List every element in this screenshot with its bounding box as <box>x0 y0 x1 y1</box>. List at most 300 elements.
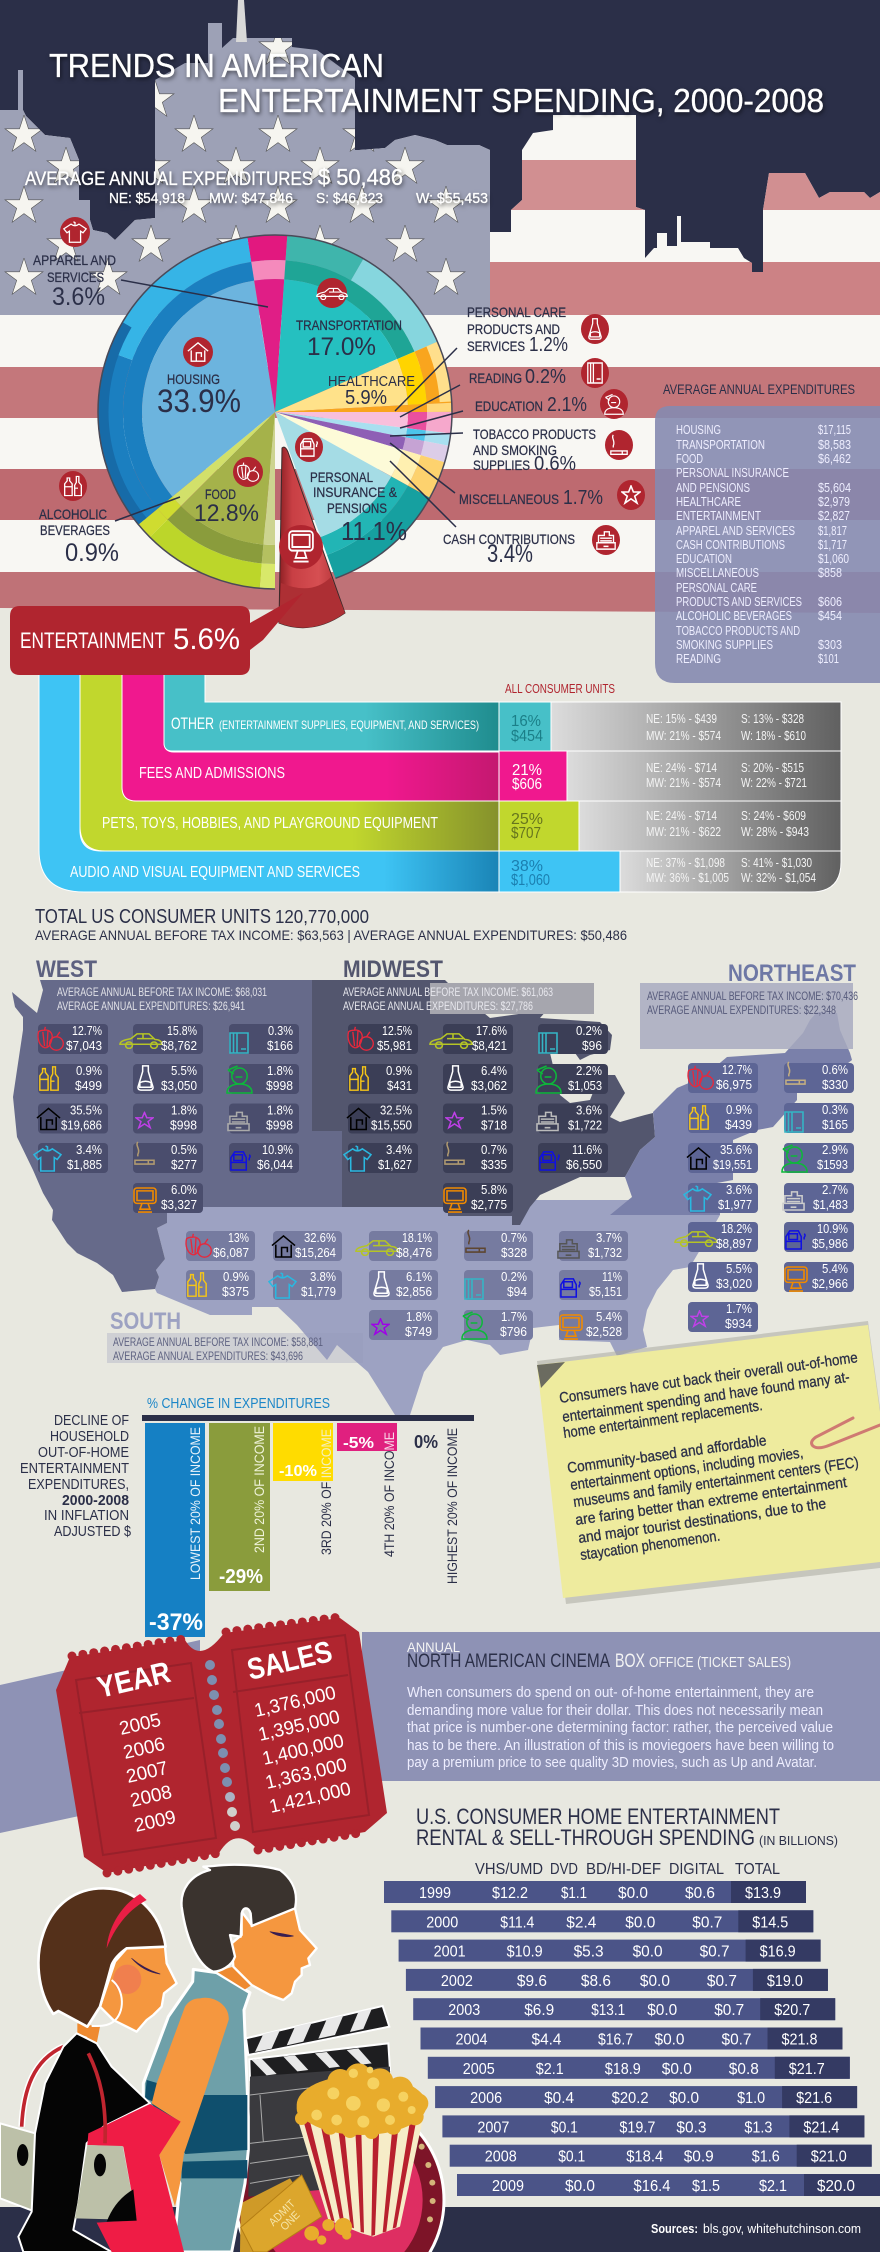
midwest heading: AVERAGE ANNUAL BEFORE TAX INCOME: $61,063 <box>343 987 553 999</box>
panel: average annual expenditures list: $6,462 <box>818 452 851 466</box>
sticky note: are faring better than extreme entertainment <box>574 1474 849 1529</box>
stats: midwest: 17.6% <box>476 1023 507 1038</box>
table rows: spending by year: $0.4 <box>544 2090 574 2107</box>
pets and toys band <box>80 660 499 851</box>
stats: midwest: 6.4% <box>481 1063 507 1078</box>
table rows: spending by year: 2006 <box>470 2090 502 2107</box>
panel: average annual expenditures list: $858 <box>818 566 842 580</box>
pie label: housing <box>157 337 241 419</box>
stats: west: $3,327 <box>161 1197 197 1212</box>
pie label: transportation: TRANSPORTATION <box>296 317 402 333</box>
panel: average annual expenditures list: HOUSING <box>676 423 721 437</box>
table rows: spending by year: $1.0 <box>737 2090 765 2107</box>
panel: average annual expenditures list: $17,115 <box>818 423 851 437</box>
chart: decline in out-of-home expenditures: 3RD 20% OF INCOME <box>318 1429 334 1555</box>
stats: south: $2,856 <box>396 1284 432 1299</box>
ticket: year and sales table: 2006 <box>121 1734 167 1764</box>
table rows: spending by year: $0.0 <box>565 2178 595 2195</box>
table rows: spending by year: $20.0 <box>817 2178 855 2195</box>
table rows: spending by year: $19.7 <box>619 2119 655 2136</box>
pie label: tobacco: SUPPLIES <box>473 457 530 473</box>
stats: south: 5.4% <box>596 1309 622 1324</box>
table rows: spending by year: 2009 <box>492 2178 524 2195</box>
stats: midwest: $6,550 <box>566 1157 602 1172</box>
regional breakdown values: NE: 15% - $439 <box>646 711 717 726</box>
panel: average annual expenditures list: AND PENSIONS <box>676 481 750 495</box>
stats: northeast: $934 <box>725 1316 752 1331</box>
pie label: cash contributions: 3.4% <box>487 540 533 568</box>
stats: south: 13% <box>228 1230 249 1245</box>
chart side label: HOUSEHOLD <box>50 1428 129 1445</box>
panel: average annual expenditures list: $1,060 <box>818 552 849 566</box>
table rows: spending by year: $0.3 <box>676 2119 706 2136</box>
total consumer units heading: TOTAL US CONSUMER UNITS <box>35 906 271 928</box>
sticky note: entertainment spending and have found many at- <box>561 1369 851 1426</box>
chart side label <box>20 1412 132 1540</box>
admit one tickets: ONE <box>279 2209 303 2233</box>
stats: south: 0.2% <box>501 1269 527 1284</box>
table rows: spending by year: 2000 <box>426 1914 458 1931</box>
stats: west: 6.0% <box>171 1182 197 1197</box>
table rows: spending by year: $1.6 <box>752 2149 780 2166</box>
panel: average annual expenditures list: CASH CONTRIBUTIONS <box>676 538 785 552</box>
panel: north american cinema box office: NORTH AMERICAN CINEMA <box>407 1651 610 1672</box>
chart: decline in out-of-home expenditures: 2ND 20% OF INCOME <box>251 1426 267 1553</box>
panel: average annual expenditures list: SMOKING SUPPLIES <box>676 638 773 652</box>
pie label: miscellaneous: MISCELLANEOUS <box>459 491 559 507</box>
table rows: spending by year: 2001 <box>434 1944 466 1961</box>
icon: paper clip <box>812 1418 880 1448</box>
pie label: alcoholic beverages: 0.9% <box>65 539 119 567</box>
pie label: tobacco: TOBACCO PRODUCTS <box>473 426 596 442</box>
ticket: year and sales table: 2007 <box>124 1758 170 1788</box>
footer band <box>0 2207 880 2252</box>
callout leader lines <box>115 280 463 527</box>
stats: west: $6,044 <box>257 1157 293 1172</box>
heading: home entertainment spending: RENTAL & SELL-THROUGH SPENDING <box>416 1825 755 1850</box>
stats: midwest: 0.2% <box>576 1023 602 1038</box>
panel: average annual expenditures list: $2,979 <box>818 495 850 509</box>
pie label: cash contributions <box>443 525 620 568</box>
stats: west: 0.5% <box>171 1142 197 1157</box>
regional breakdown values: S: 41% - $1,030 <box>741 855 812 870</box>
popcorn box <box>295 2063 428 2245</box>
stats: midwest: $718 <box>481 1118 507 1132</box>
average annual expenditures header: MW: $47,846 <box>209 190 293 207</box>
regional breakdown values: W: 18% - $610 <box>741 728 806 743</box>
pie label: education: EDUCATION <box>475 398 543 414</box>
table rows: spending by year: $12.2 <box>492 1885 528 1902</box>
entertainment slice cone <box>279 447 345 628</box>
pie label: housing: 33.9% <box>157 383 241 419</box>
header night sky <box>0 0 880 330</box>
stats: northeast: 12.7% <box>722 1062 752 1077</box>
stats: south: $1,732 <box>588 1245 622 1260</box>
chart side label: EXPENDITURES, <box>28 1476 129 1493</box>
panel: average annual expenditures list: PRODUCTS AND SERVICES <box>676 595 802 609</box>
panel: average annual expenditures list: HEALTHCARE <box>676 495 741 509</box>
table rows: spending by year: $0.6 <box>685 1885 715 1902</box>
fees and admissions band <box>122 660 499 801</box>
sources: Sources: <box>651 2221 698 2236</box>
stats: west: 0.3% <box>268 1023 293 1038</box>
table rows: spending by year: $18.9 <box>605 2061 641 2078</box>
pie label: cash contributions: CASH CONTRIBUTIONS <box>443 531 575 547</box>
stats: northeast: $439 <box>725 1117 752 1132</box>
pie label: personal insurance <box>295 432 407 546</box>
stats: south: $5,151 <box>589 1284 622 1299</box>
panel: entertainment breakdown: $454 <box>511 728 543 745</box>
housing rim shadow <box>33 170 517 654</box>
map: west region <box>12 980 342 1292</box>
stats: northeast: $1593 <box>817 1157 848 1172</box>
other band <box>164 660 499 751</box>
table rows: spending by year: $9.6 <box>517 1973 547 1990</box>
title: ENTERTAINMENT SPENDING, 2000-2008 <box>218 82 824 119</box>
chart: decline in out-of-home expenditures: -10% <box>279 1463 317 1480</box>
table rows: spending by year: $13.1 <box>591 2002 625 2019</box>
panel: average annual expenditures list: $303 <box>818 638 842 652</box>
stats: west: 1.8% <box>267 1102 293 1118</box>
panel: north american cinema box office <box>0 1632 880 1833</box>
average annual expenditures header: $ 50,486 <box>318 164 403 190</box>
regional breakdown values: W: 28% - $943 <box>741 824 809 839</box>
stats: south: $749 <box>405 1324 432 1339</box>
stats: south <box>186 1230 628 1340</box>
stats: west: 35.5% <box>70 1102 102 1118</box>
sticky note: home entertainment replacements. <box>562 1397 764 1442</box>
south heading: SOUTH <box>110 1308 181 1335</box>
panel: entertainment breakdown: $606 <box>512 776 542 793</box>
stats: west: 1.8% <box>267 1063 293 1078</box>
west heading: AVERAGE ANNUAL BEFORE TAX INCOME: $68,031 <box>57 987 267 999</box>
chart side label: DECLINE OF <box>54 1412 129 1429</box>
table rows: spending by year: $0.0 <box>669 2090 699 2107</box>
panel: entertainment breakdown: 38% <box>511 858 543 875</box>
stats: south: 3.7% <box>596 1230 622 1245</box>
stats: northeast: $5,986 <box>812 1236 848 1251</box>
stats: midwest: $2,775 <box>471 1197 507 1212</box>
panel: average annual expenditures list: TOBACCO PRODUCTS AND <box>676 624 800 638</box>
pie label: education: 2.1% <box>547 394 587 416</box>
stats: northeast: $19,551 <box>713 1157 752 1172</box>
panel: average annual expenditures list: $454 <box>818 609 842 623</box>
table rows: spending by year: $5.3 <box>574 1944 604 1961</box>
heading: home entertainment spending: (IN BILLIONS) <box>759 1833 838 1848</box>
stats: south: 11% <box>602 1269 622 1284</box>
panel: entertainment breakdown: OTHER <box>171 714 214 733</box>
stats: south: 0.7% <box>501 1230 527 1245</box>
panel: entertainment breakdown: AUDIO AND VISUAL EQUIPMENT AND SERVICES <box>70 864 360 881</box>
ticket: year and sales table: SALES <box>244 1635 335 1687</box>
table rows: spending by year: $20.2 <box>612 2090 649 2107</box>
chart side label: ADJUSTED $ <box>54 1523 132 1540</box>
clapperboard <box>246 2006 390 2197</box>
panel: entertainment breakdown: ALL CONSUMER UNITS <box>505 681 615 696</box>
chart: decline in out-of-home expenditures: -37% <box>149 1609 203 1636</box>
stats: west: 5.5% <box>171 1063 197 1078</box>
pie label: alcoholic beverages: ALCOHOLIC <box>39 506 107 522</box>
regional breakdown values: S: 13% - $328 <box>741 711 804 726</box>
pie label: food: 12.8% <box>194 500 259 527</box>
pie label: apparel: 3.6% <box>52 283 105 311</box>
table rows: spending by year: $0.7 <box>692 1914 722 1931</box>
stats: midwest: 2.2% <box>576 1063 602 1078</box>
stats: west: $998 <box>266 1078 293 1093</box>
stats: midwest: $431 <box>387 1078 412 1093</box>
panel: north american cinema box office: ANNUAL <box>407 1639 460 1655</box>
midwest heading: MIDWEST <box>343 956 443 983</box>
stats: west: $277 <box>171 1157 197 1172</box>
stats: south: $8,476 <box>396 1245 432 1260</box>
pie label: miscellaneous <box>459 480 645 510</box>
ticket: year and sales table: 1,363,000 <box>263 1755 349 1794</box>
pie rim line <box>98 235 452 589</box>
stats: midwest: $8,421 <box>472 1038 507 1053</box>
table column headers: VHS/UMD <box>475 1861 543 1878</box>
panel: average annual expenditures list: $2,827 <box>818 509 850 523</box>
pie label: food: FOOD <box>205 486 236 502</box>
pie label: transportation: 17.0% <box>307 333 376 361</box>
stats: northeast: $330 <box>822 1077 848 1092</box>
pie label: alcoholic beverages: BEVERAGES <box>40 522 110 538</box>
stats: midwest: $3,062 <box>471 1078 507 1093</box>
stats: south: $94 <box>507 1284 527 1299</box>
table rows: spending by year: 1999 <box>419 1885 451 1902</box>
pie label: alcoholic beverages <box>39 471 119 567</box>
stats: northeast: 35.6% <box>720 1142 752 1157</box>
table rows: spending by year: 2004 <box>456 2032 488 2048</box>
panel: entertainment breakdown: (ENTERTAINMENT SUPPLIES, EQUIPMENT, AND SERVICES) <box>219 718 479 732</box>
stats: west: 1.8% <box>171 1102 197 1118</box>
stats: midwest <box>344 1023 608 1213</box>
stats: west: $19,686 <box>61 1118 102 1132</box>
table rows: spending by year: $0.1 <box>551 2119 578 2136</box>
stats: northeast: 5.5% <box>726 1261 752 1276</box>
panel: average annual expenditures list: MISCELLANEOUS <box>676 566 759 580</box>
table rows: spending by year: $4.4 <box>532 2032 562 2048</box>
stats: midwest: 5.8% <box>481 1182 507 1197</box>
stats: south: $796 <box>500 1324 527 1339</box>
tower antenna <box>236 0 247 42</box>
panel: average annual expenditures list: $8,583 <box>818 438 851 452</box>
stats: south: $15,264 <box>295 1245 336 1260</box>
stats: northeast: 5.4% <box>822 1261 848 1276</box>
stats: south: 0.9% <box>223 1269 249 1284</box>
panel: entertainment breakdown: 16% <box>511 713 541 730</box>
panel: average annual expenditures list: TRANSPORTATION <box>676 438 765 452</box>
regional breakdown values: S: 24% - $609 <box>741 808 806 823</box>
stats: west: $7,043 <box>66 1038 102 1053</box>
stats: south: 3.8% <box>310 1269 336 1284</box>
table rows: spending by year: $1.1 <box>561 1885 587 1902</box>
pie label: reading: 0.2% <box>525 366 566 388</box>
chart side label: 2000-2008 <box>62 1492 129 1509</box>
table rows: spending by year: $0.0 <box>618 1885 648 1902</box>
heading: home entertainment spending: U.S. CONSUMER HOME ENTERTAINMENT <box>416 1804 780 1829</box>
table rows: spending by year: $21.7 <box>789 2061 825 2078</box>
panel: average annual expenditures list <box>655 381 880 683</box>
stats: south: $328 <box>501 1245 527 1260</box>
panel: average annual expenditures list: $101 <box>818 652 839 666</box>
panel: average annual expenditures list: $1,717 <box>818 538 847 552</box>
table rows: spending by year: 2005 <box>463 2061 495 2078</box>
table rows: spending by year: 2002 <box>441 1973 473 1990</box>
regional breakdown values: NE: 24% - $714 <box>646 808 717 823</box>
panel: average annual expenditures list: PERSONAL INSURANCE <box>676 466 789 480</box>
panel: average annual expenditures list: ENTERTAINMENT <box>676 509 761 523</box>
pie label: education <box>475 389 628 419</box>
panel: average annual expenditures list: FOOD <box>676 452 703 466</box>
table rows: spending by year: $2.4 <box>566 1914 596 1931</box>
panel: average annual expenditures list: $1,817 <box>818 524 847 538</box>
pie middle ring <box>73 210 477 614</box>
west heading: AVERAGE ANNUAL EXPENDITURES: $26,941 <box>57 1001 245 1013</box>
grey regional bars <box>551 702 841 892</box>
cinema paragraph: has to be there. An illustration of this is moviegoers have been willing to <box>407 1737 834 1754</box>
stats: west: $3,050 <box>161 1078 197 1093</box>
film reel <box>236 2096 444 2252</box>
table rows: spending by year: $0.7 <box>714 2002 744 2019</box>
pie label: healthcare: 5.9% <box>345 387 387 409</box>
sticky note: and major tourist destinations, due to the <box>577 1495 827 1547</box>
regional breakdown values: MW: 21% - $622 <box>646 824 721 839</box>
title: TRENDS IN AMERICAN <box>49 47 384 84</box>
stats: midwest: $5,981 <box>377 1038 412 1053</box>
stats: midwest: 32.5% <box>380 1102 412 1118</box>
table column headers: TOTAL <box>735 1861 780 1878</box>
table rows: spending by year: $21.6 <box>796 2090 832 2107</box>
pie label: miscellaneous: 1.7% <box>563 487 603 509</box>
table rows: spending by year: $0.9 <box>684 2149 714 2166</box>
stats: west: $499 <box>75 1078 102 1093</box>
table rows: spending by year: $16.9 <box>760 1944 796 1961</box>
stats: midwest: 12.5% <box>382 1023 412 1038</box>
sticky note: Community-based and affordable <box>566 1432 768 1477</box>
regional breakdown values: MW: 21% - $574 <box>646 728 721 743</box>
stats: northeast: $3,020 <box>716 1276 752 1291</box>
midwest heading <box>343 956 594 1014</box>
table column headers: DVD <box>550 1861 578 1878</box>
midwest heading: AVERAGE ANNUAL EXPENDITURES: $27,786 <box>343 1001 533 1013</box>
map: northeast region <box>610 1012 852 1215</box>
panel: average annual expenditures list: APPAREL AND SERVICES <box>676 524 795 538</box>
stats: northeast: 2.7% <box>822 1182 848 1197</box>
northeast heading: NORTHEAST <box>728 960 856 987</box>
pie outer ring <box>42 179 508 645</box>
cinema paragraph: pay a premium price to see quality 3D movies, such as Up and Avatar. <box>407 1754 817 1771</box>
stats: west <box>34 1023 299 1213</box>
stats: midwest: $1,627 <box>378 1157 412 1172</box>
table rows: spending by year: $0.0 <box>640 1973 670 1990</box>
chart: decline in out-of-home expenditures: LOWEST 20% OF INCOME <box>187 1427 203 1580</box>
stats: northeast: 0.9% <box>726 1102 752 1117</box>
stats: west: $998 <box>170 1118 197 1132</box>
west heading <box>36 956 267 1013</box>
woman <box>17 1888 184 2252</box>
panel: average annual expenditures list: READING <box>676 652 721 666</box>
stats: northeast: 3.6% <box>726 1182 752 1197</box>
cinema paragraph: demanding more value for their dollar. This does not necessarily mean <box>407 1702 823 1719</box>
regional breakdown values: MW: 21% - $574 <box>646 775 721 790</box>
pie label: tobacco <box>473 426 633 475</box>
pie label: tobacco: 0.6% <box>534 453 576 475</box>
panel: north american cinema box office: BOX <box>615 1651 645 1672</box>
cinema paragraph <box>407 1684 834 1771</box>
table rows: spending by year: $18.4 <box>626 2149 663 2166</box>
ticket: year and sales table: 1,395,000 <box>256 1707 342 1746</box>
stats: midwest: 0.7% <box>481 1142 507 1157</box>
pie label: personal care: PERSONAL CARE <box>467 304 566 320</box>
admit one tickets: ADMIT <box>267 2198 298 2229</box>
man <box>143 1865 317 2252</box>
pie label: apparel: SERVICES <box>47 269 104 285</box>
chart: decline in out-of-home expenditures: % CHANGE IN EXPENDITURES <box>147 1395 330 1412</box>
table rows: spending by year: $0.0 <box>625 1914 655 1931</box>
stats: west: $166 <box>267 1038 293 1053</box>
stats: south: 6.1% <box>406 1269 432 1284</box>
pie label: reading: READING <box>469 370 522 386</box>
cinema paragraph: When consumers do spend on out- of-home entertainment, they are <box>407 1684 814 1701</box>
stats: northeast: $6,975 <box>716 1077 752 1092</box>
stats: midwest: $1,053 <box>568 1078 602 1093</box>
panel: entertainment breakdown: PETS, TOYS, HOBBIES, AND PLAYGROUND EQUIPMENT <box>102 815 438 832</box>
chart: decline in out-of-home expenditures: -5% <box>343 1435 374 1452</box>
sticky note: staycation phenomenon. <box>579 1528 721 1564</box>
panel: entertainment breakdown: FEES AND ADMISSIONS <box>139 765 285 782</box>
ticket: year and sales table <box>56 1617 387 1873</box>
stats: midwest: 0.9% <box>386 1063 412 1078</box>
regional breakdown values <box>646 711 816 885</box>
stats: south: $6,087 <box>213 1245 249 1260</box>
admit one tickets <box>240 2175 322 2252</box>
ticket: year and sales table: 2009 <box>132 1807 178 1837</box>
pie label: personal care: SERVICES <box>467 338 525 354</box>
panel: average annual expenditures list: $5,604 <box>818 481 851 495</box>
share cells <box>499 702 620 892</box>
chart side label: IN INFLATION <box>44 1507 129 1524</box>
table rows: spending by year: 2008 <box>485 2149 517 2166</box>
sticky note: entertainment options, including movies, <box>569 1444 804 1494</box>
stats: west: 3.4% <box>76 1142 102 1157</box>
map: south region <box>155 1200 720 1415</box>
stats: west: 0.9% <box>76 1063 102 1078</box>
table rows: spending by year: $19.0 <box>767 1973 803 1990</box>
callout: entertainment 5.6%: ENTERTAINMENT <box>20 628 165 653</box>
ticket: year and sales table: 1,421,000 <box>267 1779 353 1818</box>
table rows: spending by year: 2007 <box>477 2119 509 2136</box>
handbag back part <box>0 2123 35 2212</box>
west heading: WEST <box>36 956 97 983</box>
stats: west: $8,762 <box>161 1038 197 1053</box>
table rows: spending by year: $1.5 <box>692 2178 720 2195</box>
stats: south: 1.7% <box>501 1309 527 1324</box>
ticket: year and sales table: 2005 <box>117 1710 163 1740</box>
chart: decline in out-of-home expenditures: HIGHEST 20% OF INCOME <box>444 1428 460 1584</box>
table rows: spending by year: $0.0 <box>633 1944 663 1961</box>
table column headers: BD/HI-DEF <box>586 1861 661 1878</box>
stats: midwest: $1,722 <box>568 1118 602 1132</box>
table rows: spending by year: $0.0 <box>654 2032 685 2048</box>
pie label: personal insurance: PENSIONS <box>327 500 387 516</box>
regional breakdown values: NE: 37% - $1,098 <box>646 855 725 870</box>
stats: south: $1,779 <box>301 1284 336 1299</box>
stats: northeast: $8,897 <box>716 1236 752 1251</box>
panel: entertainment breakdown: $1,060 <box>511 872 550 889</box>
stats: midwest: 11.6% <box>572 1142 602 1157</box>
table rows: spending by year <box>384 1881 880 2196</box>
pie label: apparel: APPAREL AND <box>33 252 116 268</box>
